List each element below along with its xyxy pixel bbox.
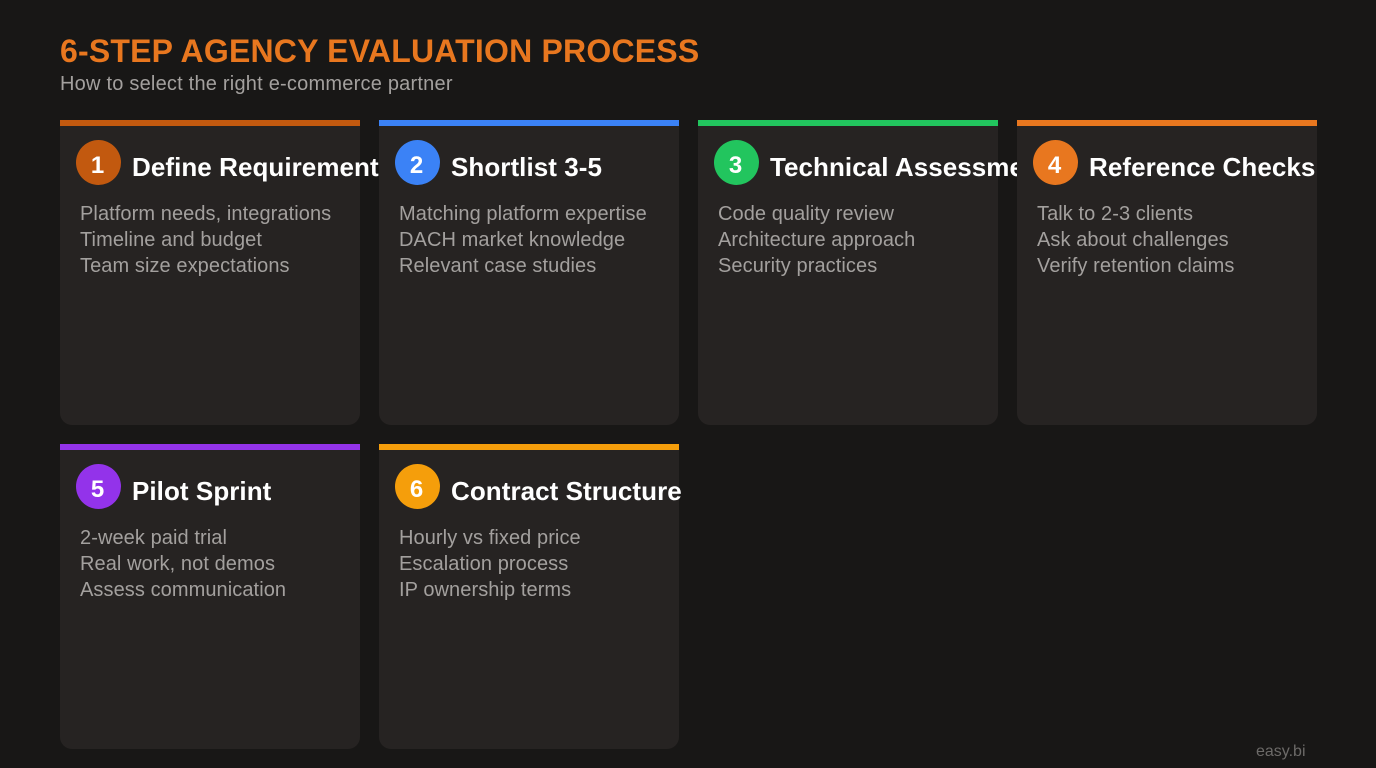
panel: step 3 [698, 120, 998, 425]
step 4 number badge: 4 [1048, 152, 1061, 179]
step 1 heading: Define Requirements [132, 152, 393, 182]
step 4 text [1037, 203, 1234, 277]
step 3 text: Security practices [718, 255, 877, 277]
step 3 text: Architecture approach [718, 229, 915, 251]
step 6 text: Escalation process [399, 553, 568, 575]
step 6 text: Hourly vs fixed price [399, 527, 581, 549]
step 4 number badge [1033, 140, 1078, 185]
step 5 heading: Pilot Sprint [132, 476, 271, 506]
panel: step 2 [379, 120, 679, 425]
step 2 text: Relevant case studies [399, 255, 596, 277]
panel: step 5 [60, 444, 360, 749]
step 1 number badge [76, 140, 121, 185]
step 5 number badge [76, 464, 121, 509]
step 3 heading: Technical Assessment [770, 152, 1049, 182]
step 4 top bar [1017, 120, 1317, 126]
step 5 text: Real work, not demos [80, 553, 275, 575]
step 2 top bar [379, 120, 679, 126]
step 2 number badge [395, 140, 440, 185]
step 6 number badge: 6 [410, 476, 423, 503]
step 1 text [80, 203, 331, 277]
step 5 text: 2-week paid trial [80, 527, 227, 549]
step 1 text: Team size expectations [80, 255, 290, 277]
step 3 text [718, 203, 915, 277]
step 1 number badge: 1 [91, 152, 104, 179]
step 2 text: Matching platform expertise [399, 203, 647, 225]
step 4 text: Ask about challenges [1037, 229, 1229, 251]
step 1 text: Timeline and budget [80, 229, 262, 251]
step 5 text [80, 527, 286, 601]
step 2 text [399, 203, 647, 277]
step 3 text: Code quality review [718, 203, 894, 225]
step 6 top bar [379, 444, 679, 450]
step 1 text: Platform needs, integrations [80, 203, 331, 225]
panel: step 4 [1017, 120, 1317, 425]
step 5 text: Assess communication [80, 579, 286, 601]
step 6 heading: Contract Structure [451, 476, 682, 506]
step 2 heading: Shortlist 3-5 [451, 152, 602, 182]
panel: step 1 [60, 120, 360, 425]
step 5 number badge: 5 [91, 476, 104, 503]
step 4 text: Talk to 2-3 clients [1037, 203, 1193, 225]
step 1 top bar [60, 120, 360, 126]
title: 6-STEP AGENCY EVALUATION PROCESS [60, 33, 699, 69]
footer brand: easy.bi [1256, 743, 1306, 760]
step 6 number badge [395, 464, 440, 509]
step 3 number badge: 3 [729, 152, 742, 179]
step 6 text [399, 527, 581, 601]
panel: step 6 [379, 444, 679, 749]
step 5 top bar [60, 444, 360, 450]
step 6 text: IP ownership terms [399, 579, 571, 601]
step 4 text: Verify retention claims [1037, 255, 1234, 277]
subtitle: How to select the right e-commerce partner [60, 73, 453, 95]
step 3 number badge [714, 140, 759, 185]
step 2 text: DACH market knowledge [399, 229, 625, 251]
step 4 heading: Reference Checks [1089, 152, 1315, 182]
step 2 number badge: 2 [410, 152, 423, 179]
step 3 top bar [698, 120, 998, 126]
